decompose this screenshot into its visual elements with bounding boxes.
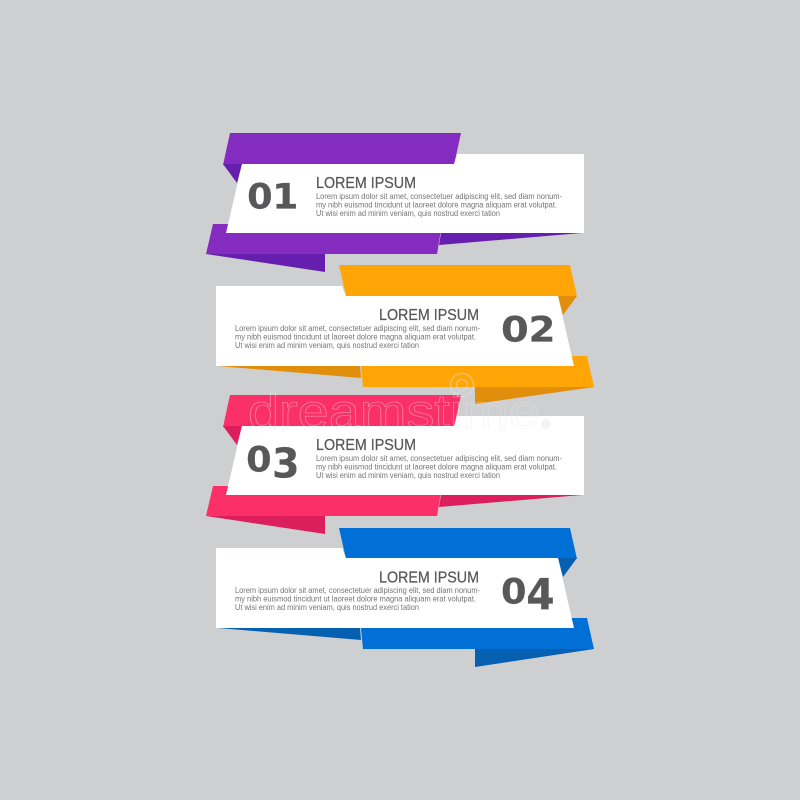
panel: step 01 banner (206, 133, 584, 272)
body text 04: Lorem ipsum dolor sit amet, consectetuer adipiscing elit, sed diam nonum- (235, 586, 480, 595)
body text 01: Ut wisi enim ad minim veniam, quis nostrud exerci tation (316, 209, 500, 218)
ribbon: orange top fold (558, 296, 577, 315)
number 03 (246, 440, 300, 488)
white card 04 (216, 548, 574, 628)
body text 02: Ut wisi enim ad minim veniam, quis nostrud exerci tation (235, 341, 419, 350)
body text 04: Ut wisi enim ad minim veniam, quis nostrud exerci tation (235, 603, 419, 612)
number 02: 2 (528, 310, 556, 350)
ribbon: blue bottom-right fold (475, 649, 594, 667)
number 04 (501, 571, 555, 620)
number 01: 1 (272, 178, 298, 218)
white card 02 (216, 286, 574, 366)
body text 02 (235, 324, 480, 350)
body text 02: Lorem ipsum dolor sit amet, consectetuer adipiscing elit, sed diam nonum- (235, 324, 480, 333)
body text 01: Lorem ipsum dolor sit amet, consectetuer adipiscing elit, sed diam nonum- (316, 192, 562, 201)
body text 03 (316, 454, 562, 480)
white card 03 (226, 416, 584, 495)
panel: step 04 banner (216, 528, 594, 667)
ribbon: purple bottom band (206, 224, 442, 254)
ribbon: pink bottom band (206, 486, 442, 516)
number 04: 0 (501, 572, 526, 612)
watermark: dreamstime (248, 386, 540, 439)
ribbon: pink bottom-left fold (206, 516, 325, 534)
body text 04: my nibh euismod tincidunt ut laoreet dolore magna aliquam erat volutpat. (235, 594, 476, 604)
ribbon: purple bottom-right fold (439, 233, 582, 245)
body text 02: my nibh euismod tincidunt ut laoreet dolore magna aliquam erat volutpat. (235, 332, 476, 342)
ribbon: blue top fold (558, 558, 577, 577)
ribbon: purple bottom-left fold (206, 254, 325, 272)
heading 01: LOREM IPSUM (316, 175, 416, 192)
number 01 (247, 178, 298, 218)
heading 04: LOREM IPSUM (379, 570, 479, 586)
ribbon: orange bottom-right fold (475, 387, 594, 404)
number 02 (501, 310, 556, 350)
number 03: 3 (272, 440, 300, 488)
ribbon: purple top band (223, 133, 461, 165)
ribbon: blue top band (339, 528, 577, 559)
white card 01 (226, 154, 584, 233)
panel: step 03 banner (206, 395, 584, 534)
ribbon: orange top band (339, 265, 577, 296)
heading 02: LOREM IPSUM (379, 307, 479, 324)
body text 03: Ut wisi enim ad minim veniam, quis nostrud exerci tation (316, 471, 500, 480)
watermark (248, 374, 551, 439)
number 04: 4 (526, 571, 555, 620)
ribbon: pink top fold (223, 426, 242, 445)
ribbon: purple top fold (223, 164, 242, 183)
ribbon: orange bottom band (360, 356, 594, 387)
number 02: 0 (501, 310, 529, 350)
body text 03: my nibh euismod tincidunt ut laoreet dolore magna aliquam erat volutpat. (316, 462, 557, 472)
ribbon: orange bottom-left fold (218, 366, 361, 378)
heading 03: LOREM IPSUM (316, 437, 416, 454)
body text 04 (235, 586, 480, 612)
panel: step 02 banner (216, 265, 594, 404)
ribbon: blue bottom band (360, 618, 594, 649)
ribbon: pink bottom-right fold (439, 495, 582, 507)
body text 01: my nibh euismod tincidunt ut laoreet dolore magna aliquam erat volutpat. (316, 200, 557, 210)
body text 03: Lorem ipsum dolor sit amet, consectetuer adipiscing elit, sed diam nonum- (316, 454, 562, 463)
number 01: 0 (247, 178, 273, 218)
body text 01 (316, 192, 562, 218)
number 03: 0 (246, 440, 272, 480)
ribbon: pink top band (223, 395, 461, 427)
ribbon: blue bottom-left fold (218, 628, 361, 640)
